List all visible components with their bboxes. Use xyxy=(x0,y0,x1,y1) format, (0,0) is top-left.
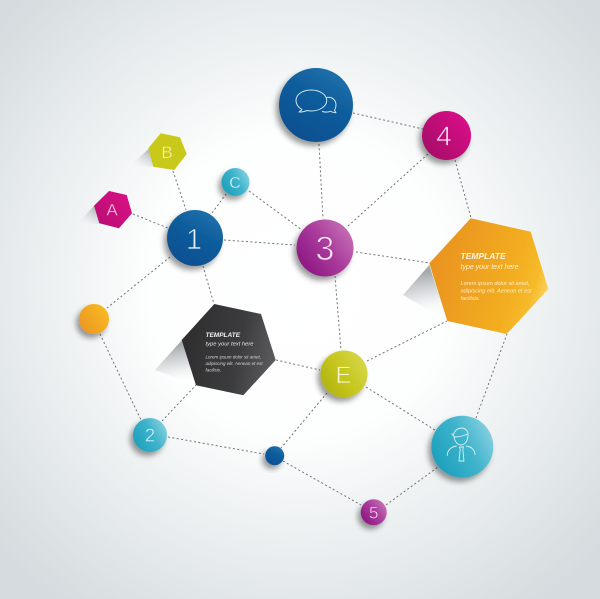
hexagon callout: dark template: type your text here xyxy=(206,342,254,348)
hexagon: A: A xyxy=(106,200,118,220)
hexagon callout: dark template: facilisis. xyxy=(206,368,221,372)
hexagon callout: dark template: TEMPLATE xyxy=(206,332,241,339)
hexagon callout: dark template xyxy=(155,304,276,395)
circle: speech bubbles xyxy=(279,68,353,142)
circle: 2 xyxy=(133,418,167,452)
circle: 5: 5 xyxy=(369,504,378,522)
circle: person xyxy=(431,416,493,478)
icon: speech bubbles xyxy=(296,90,336,113)
circle: 2: 2 xyxy=(145,424,155,446)
circle: C: C xyxy=(229,175,241,192)
circle: orange xyxy=(79,304,109,334)
hexagon shadow xyxy=(155,340,196,385)
circle: C xyxy=(222,168,250,196)
hexagon callout: orange template xyxy=(403,218,548,334)
circle: 1: 1 xyxy=(186,224,202,256)
circle: small blue xyxy=(265,446,284,465)
circle: 4: 4 xyxy=(436,120,452,152)
circle: E xyxy=(320,350,368,398)
hexagon: B xyxy=(131,133,187,170)
hexagon: B: B xyxy=(161,143,173,162)
hexagon: A xyxy=(78,191,132,228)
hexagon callout: orange template: adipiscing elit. Aenean et est xyxy=(460,288,532,294)
circle: 1 xyxy=(167,210,223,266)
hexagon callout: dark template: Lorem ipsum dolor sit amet, xyxy=(206,354,261,360)
hexagon callout: dark template: adipiscing elit. Aenean et est xyxy=(206,361,263,366)
circle: 3 xyxy=(296,220,354,276)
circle: E: E xyxy=(335,362,352,389)
hexagon callout: orange template: type your text here xyxy=(460,264,519,271)
icon: person with tie xyxy=(447,428,475,461)
hexagon callout: orange template: facilisis. xyxy=(460,296,480,302)
circle: 5 xyxy=(361,499,387,525)
hexagon shadow xyxy=(403,265,447,321)
circle: 3: 3 xyxy=(316,230,334,268)
circle: 4 xyxy=(422,111,471,160)
hexagon callout: orange template: Lorem ipsum dolor sit amet, xyxy=(460,281,530,287)
dashed connection lines xyxy=(100,113,507,505)
hexagon callout: orange template: TEMPLATE xyxy=(460,251,506,261)
